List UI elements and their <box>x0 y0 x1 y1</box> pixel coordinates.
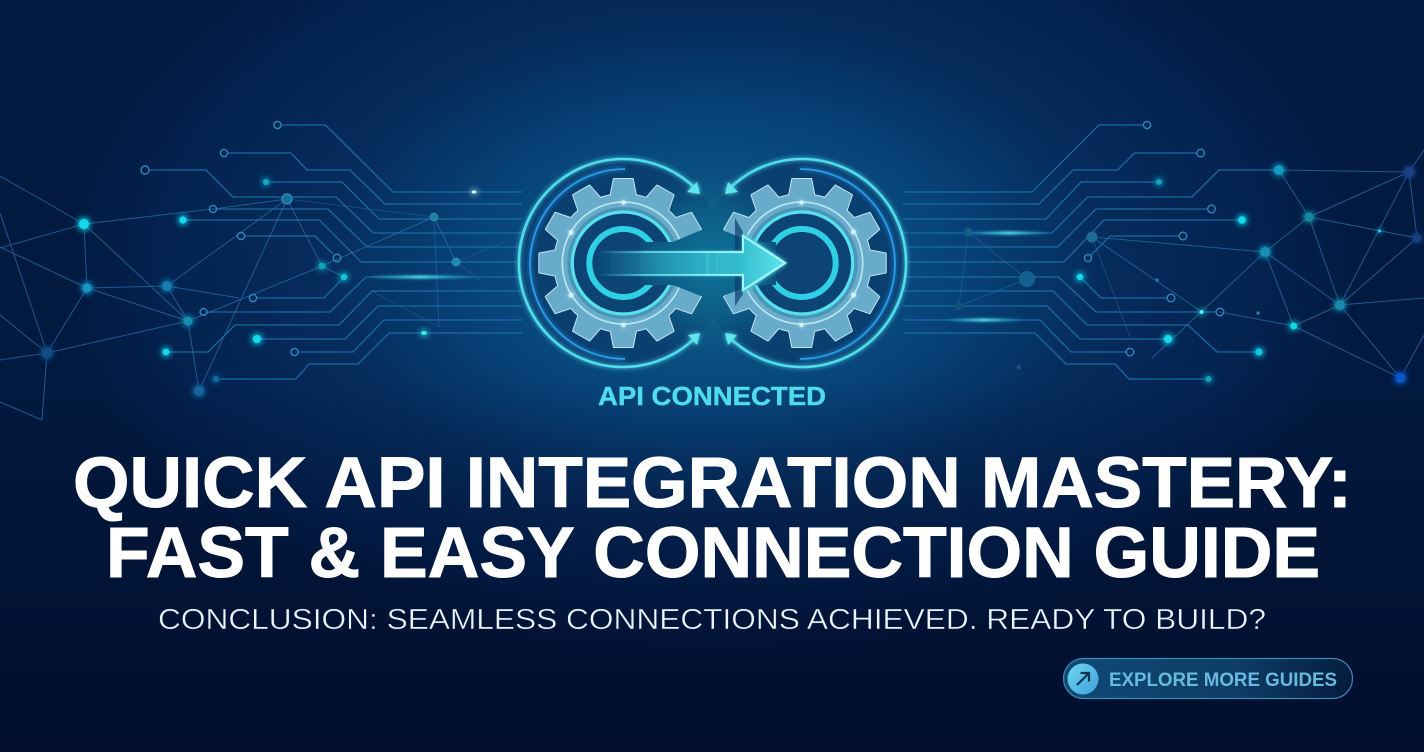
left circuit traces <box>149 125 522 379</box>
icon: arrow in circle <box>1068 664 1098 694</box>
right trace glow streaks <box>945 232 1050 322</box>
left outer loop <box>519 159 700 367</box>
title line 2: FAST & EASY CONNECTION GUIDE <box>106 514 1320 593</box>
api connection logo <box>519 159 906 367</box>
title <box>73 444 1352 593</box>
gear highlight dots <box>569 200 856 327</box>
left gear <box>539 179 707 347</box>
left nodes <box>42 121 476 396</box>
left node network <box>0 176 504 420</box>
title line 1: QUICK API INTEGRATION MASTERY: <box>73 444 1352 523</box>
loop interiors <box>519 159 906 367</box>
button: explore more guides <box>1064 658 1352 698</box>
left trace glow streak <box>366 276 474 278</box>
arrow <box>597 218 787 306</box>
button label: EXPLORE MORE GUIDES <box>1109 670 1337 691</box>
right node network <box>959 150 1424 378</box>
right circuit traces <box>903 125 1279 379</box>
subtitle: CONCLUSION: SEAMLESS CONNECTIONS ACHIEVED. READY TO BUILD? <box>158 604 1266 636</box>
right outer loop <box>725 159 906 367</box>
right nodes <box>955 121 1421 383</box>
right gear <box>718 179 886 347</box>
badge label: API CONNECTED: API CONNECTED <box>598 381 826 411</box>
